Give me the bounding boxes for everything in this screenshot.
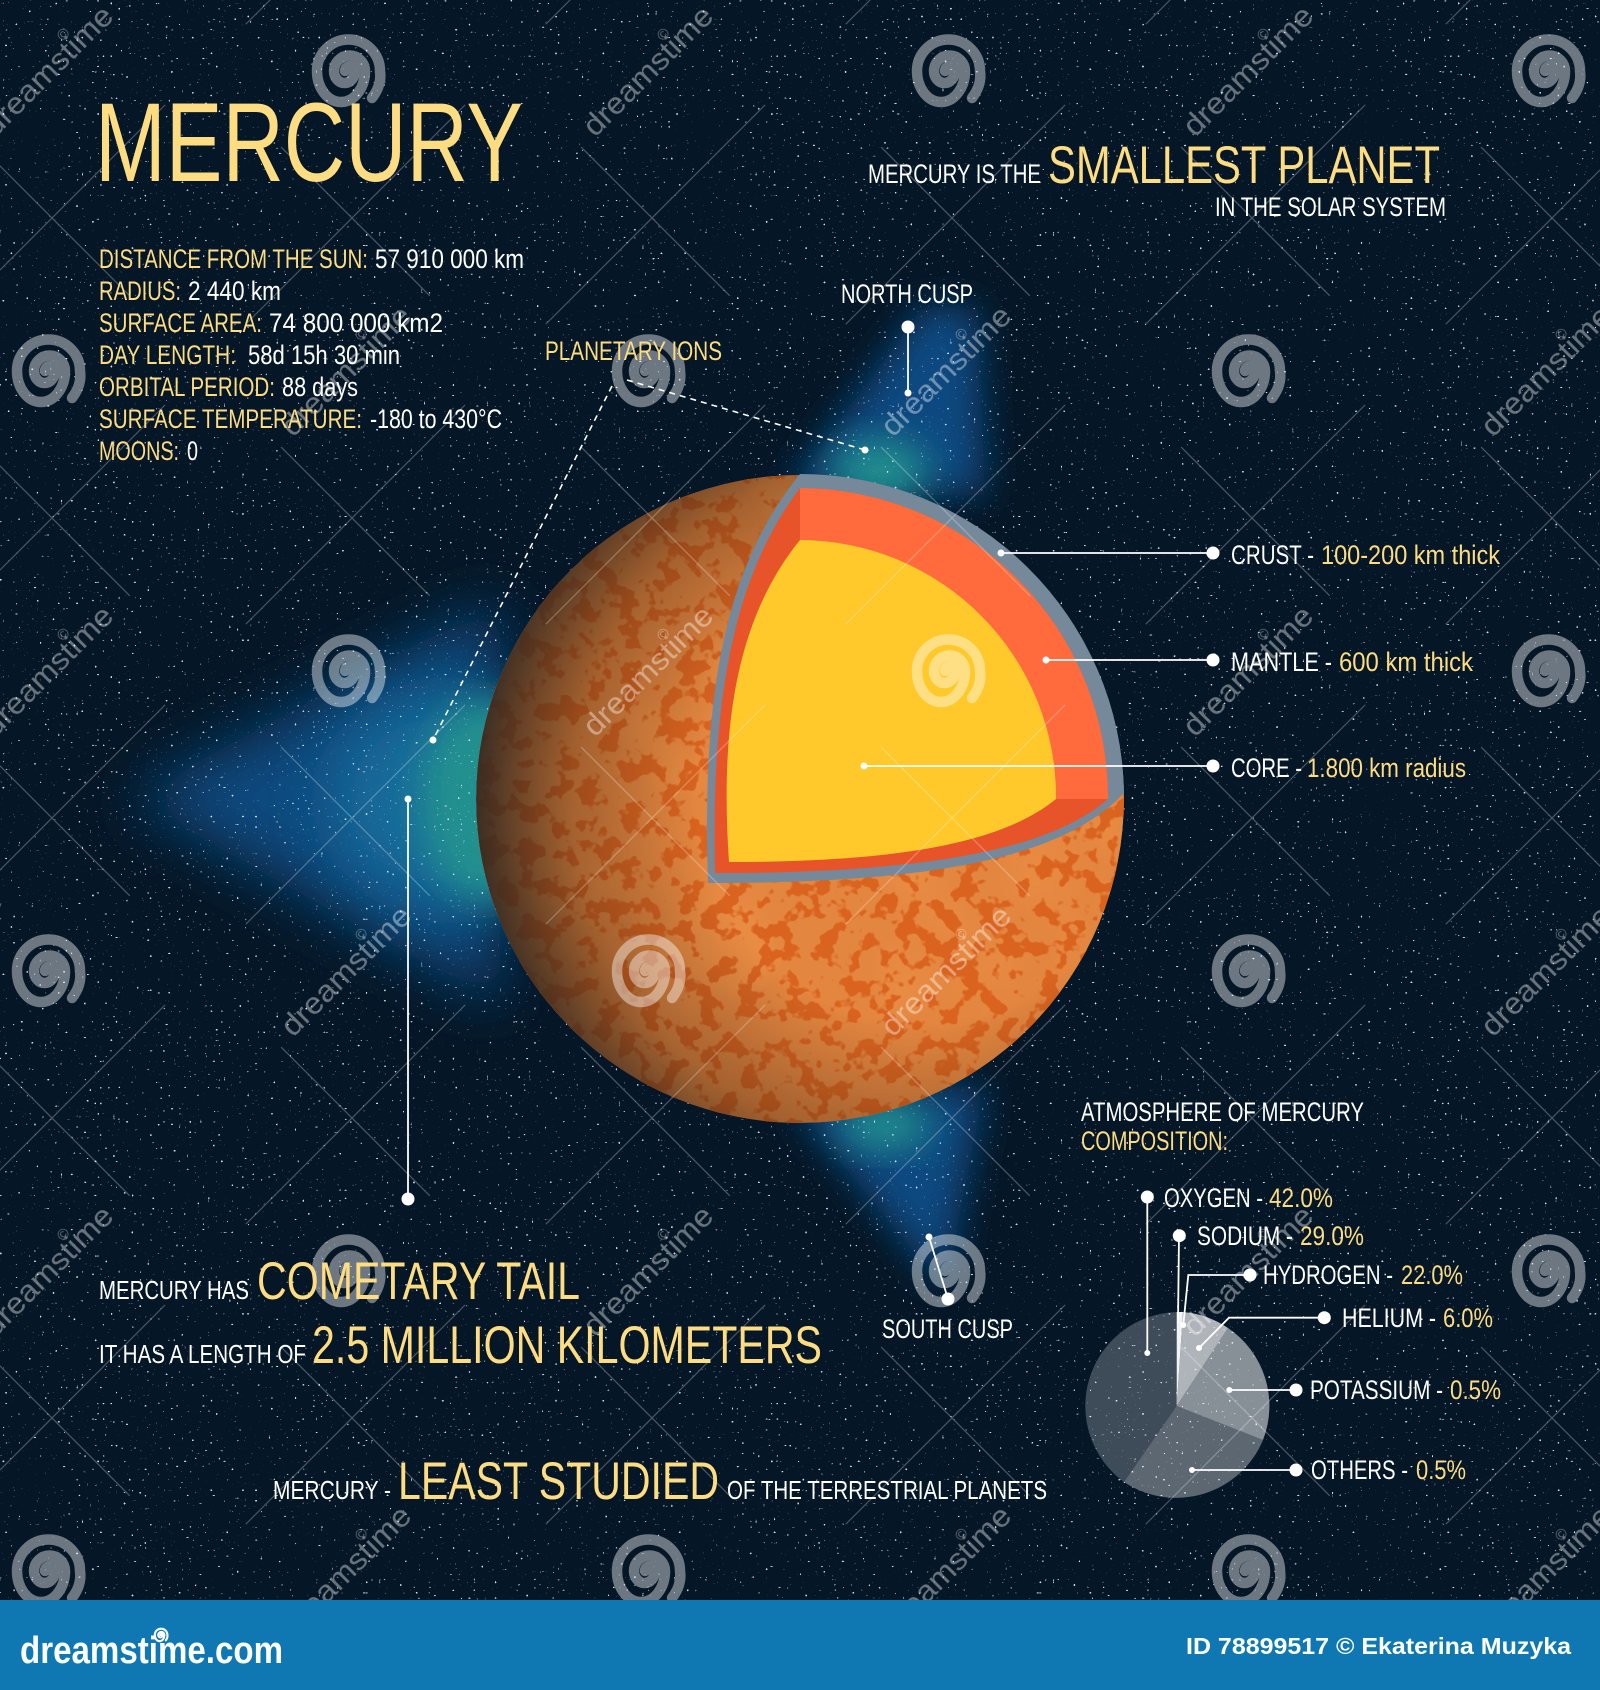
watermark: diagonal wordmarks: dreamstime: [273, 298, 418, 443]
watermark: diagonal wordmarks: dreamstime: [273, 898, 418, 1043]
headline: cometary tail: IT HAS A LENGTH OF: [99, 1341, 306, 1369]
watermark: diagonal wordmarks: ©: [952, 325, 972, 345]
core callout: [860, 753, 1466, 783]
planet facts: 74 800 000 km2: [269, 308, 443, 338]
watermark: diagonal wordmarks: ©: [1552, 325, 1572, 345]
planet cutaway: [470, 470, 1130, 1130]
watermark: diagonal wordmarks: ©: [54, 625, 74, 645]
footer wordmark: dreamstime.com: [20, 1630, 283, 1672]
watermark: diagonal wordmarks: dreamstime: [873, 1498, 1018, 1643]
pie callout: others: OTHERS -: [1311, 1455, 1408, 1485]
north cusp glow: [785, 305, 985, 500]
left cometary tail glow: [130, 600, 570, 1005]
pie callout: oxygen: [1141, 1183, 1333, 1356]
watermark: diagonal wordmarks: ©: [654, 25, 674, 45]
planet surface: [470, 470, 1130, 1130]
planet facts: 88 days: [282, 372, 358, 402]
south cusp glow: [790, 1085, 985, 1290]
planet facts: MOONS:: [99, 436, 179, 466]
planet facts: DISTANCE FROM THE SUN:: [99, 244, 368, 274]
mantle wall: [714, 488, 1108, 873]
north cusp callout: [841, 279, 973, 396]
atmosphere heading: ATMOSPHERE OF MERCURY: [1081, 1097, 1364, 1127]
pie callout: potassium: 0.5%: [1450, 1375, 1501, 1405]
south cusp callout: SOUTH CUSP: [882, 1314, 1013, 1344]
headline: cometary tail: MERCURY HAS: [99, 1277, 249, 1305]
planet facts: 58d 15h 30 min: [248, 340, 400, 370]
watermark: diagonal wordmarks: ©: [1254, 1225, 1274, 1245]
watermark: diagonal wordmarks: dreamstime: [1175, 0, 1320, 143]
planet facts: -180 to 430°C: [370, 404, 502, 434]
headline: cometary tail: COMETARY TAIL: [257, 1252, 580, 1311]
watermark: diagonal wordmarks: ©: [54, 25, 74, 45]
planet facts: ORBITAL PERIOD:: [99, 372, 275, 402]
headline: least studied: OF THE TERRESTRIAL PLANETS: [727, 1477, 1047, 1505]
cometary tail pointer: [402, 796, 414, 1206]
mantle callout: [1042, 647, 1474, 677]
planet facts: 57 910 000 km: [375, 244, 524, 274]
crust callout: 100-200 km thick: [1321, 540, 1501, 570]
core callout: 1.800 km radius: [1307, 753, 1466, 783]
watermark: diagonal wordmarks: ©: [654, 1225, 674, 1245]
footer bar: [0, 1600, 1600, 1690]
atmosphere heading: [1081, 1097, 1364, 1156]
watermark: diagonal wordmarks: dreamstime: [575, 1198, 720, 1343]
watermark: diagonal wordmarks: dreamstime: [273, 1498, 418, 1643]
crust callout: [998, 540, 1501, 570]
watermark: diagonal wordmarks: ©: [1254, 25, 1274, 45]
pie callout: helium: [1196, 1303, 1493, 1351]
south cusp callout: [882, 1234, 1013, 1344]
watermark: diagonal wordmarks: ©: [952, 1525, 972, 1545]
headline: least studied: [273, 1452, 1047, 1511]
core: [727, 540, 1056, 862]
pie callout: helium: 6.0%: [1443, 1303, 1493, 1333]
watermark: diagonal wordmarks: ©: [952, 925, 972, 945]
pie callout: hydrogen: [1180, 1260, 1463, 1328]
pie callout: sodium: SODIUM -: [1197, 1221, 1293, 1251]
watermark: diagonal wordmarks: ©: [352, 925, 372, 945]
footer logo spiral: [155, 1629, 167, 1641]
pie callout: potassium: [1226, 1375, 1501, 1405]
pie callout: hydrogen: 22.0%: [1401, 1260, 1463, 1290]
pie callout: others: [1189, 1455, 1466, 1485]
planet facts: RADIUS:: [99, 276, 181, 306]
watermark: diagonal wordmarks: dreamstime: [575, 0, 720, 143]
watermark: diagonal wordmarks: ©: [1254, 625, 1274, 645]
north cusp callout: NORTH CUSP: [841, 279, 973, 309]
pie callout: potassium: POTASSIUM -: [1310, 1375, 1443, 1405]
headline: cometary tail: [99, 1252, 822, 1375]
planet facts: 2 440 km: [188, 276, 281, 306]
core callout: CORE -: [1231, 753, 1302, 783]
watermark: diagonal wordmarks: ©: [1552, 925, 1572, 945]
watermark: diagonal wordmarks: ©: [654, 625, 674, 645]
headline: smallest planet: SMALLEST PLANET: [1048, 136, 1440, 195]
planetary ions callout: PLANETARY IONS: [545, 336, 722, 366]
watermark: diagonal wordmarks: dreamstime: [575, 598, 720, 743]
pie callout: hydrogen: HYDROGEN -: [1263, 1260, 1393, 1290]
headline: least studied: LEAST STUDIED: [398, 1452, 719, 1511]
watermark: diagonal wordmarks: dreamstime: [1175, 598, 1320, 743]
watermark: diagonal wordmarks: ©: [1552, 1525, 1572, 1545]
title: MERCURY: [95, 80, 523, 205]
pie callout: oxygen: OXYGEN -: [1164, 1183, 1263, 1213]
atmosphere pie chart: [1085, 1312, 1269, 1498]
watermark: diagonal wordmarks: ©: [54, 1225, 74, 1245]
headline: smallest planet: IN THE SOLAR SYSTEM: [1215, 192, 1446, 222]
planet facts: [99, 244, 524, 466]
watermark: diagonal wordmarks: dreamstime: [873, 298, 1018, 443]
headline: cometary tail: 2.5 MILLION KILOMETERS: [312, 1316, 822, 1375]
pie callout: helium: HELIUM -: [1342, 1303, 1436, 1333]
pie callout: oxygen: 42.0%: [1269, 1183, 1333, 1213]
planet facts: 0: [187, 436, 198, 466]
mantle layer: [800, 488, 1108, 799]
planet facts: SURFACE TEMPERATURE:: [99, 404, 362, 434]
watermark: diagonal wordmarks: dreamstime: [1175, 1198, 1320, 1343]
planet facts: DAY LENGTH:: [99, 340, 236, 370]
watermark: diagonal wordmarks: ©: [352, 325, 372, 345]
image credit: ID 78899517 © Ekaterina Muzyka: [1186, 1633, 1571, 1659]
pie callout: sodium: 29.0%: [1300, 1221, 1364, 1251]
crust layer: [707, 474, 1124, 883]
watermark: diagonal wordmarks: dreamstime: [873, 898, 1018, 1043]
atmosphere heading: COMPOSITION:: [1081, 1126, 1228, 1156]
crust callout: CRUST -: [1231, 540, 1314, 570]
headline: smallest planet: MERCURY IS THE: [868, 159, 1041, 189]
pie callout: others: 0.5%: [1416, 1455, 1466, 1485]
mantle callout: 600 km thick: [1339, 647, 1474, 677]
mantle callout: MANTLE -: [1231, 647, 1332, 677]
watermark: diagonal wordmarks: ©: [352, 1525, 372, 1545]
planetary ions callout: [430, 336, 868, 744]
headline: smallest planet: [868, 136, 1446, 222]
pie callout: sodium: [1173, 1221, 1364, 1323]
headline: least studied: MERCURY -: [273, 1477, 391, 1505]
planet facts: SURFACE AREA:: [99, 308, 262, 338]
